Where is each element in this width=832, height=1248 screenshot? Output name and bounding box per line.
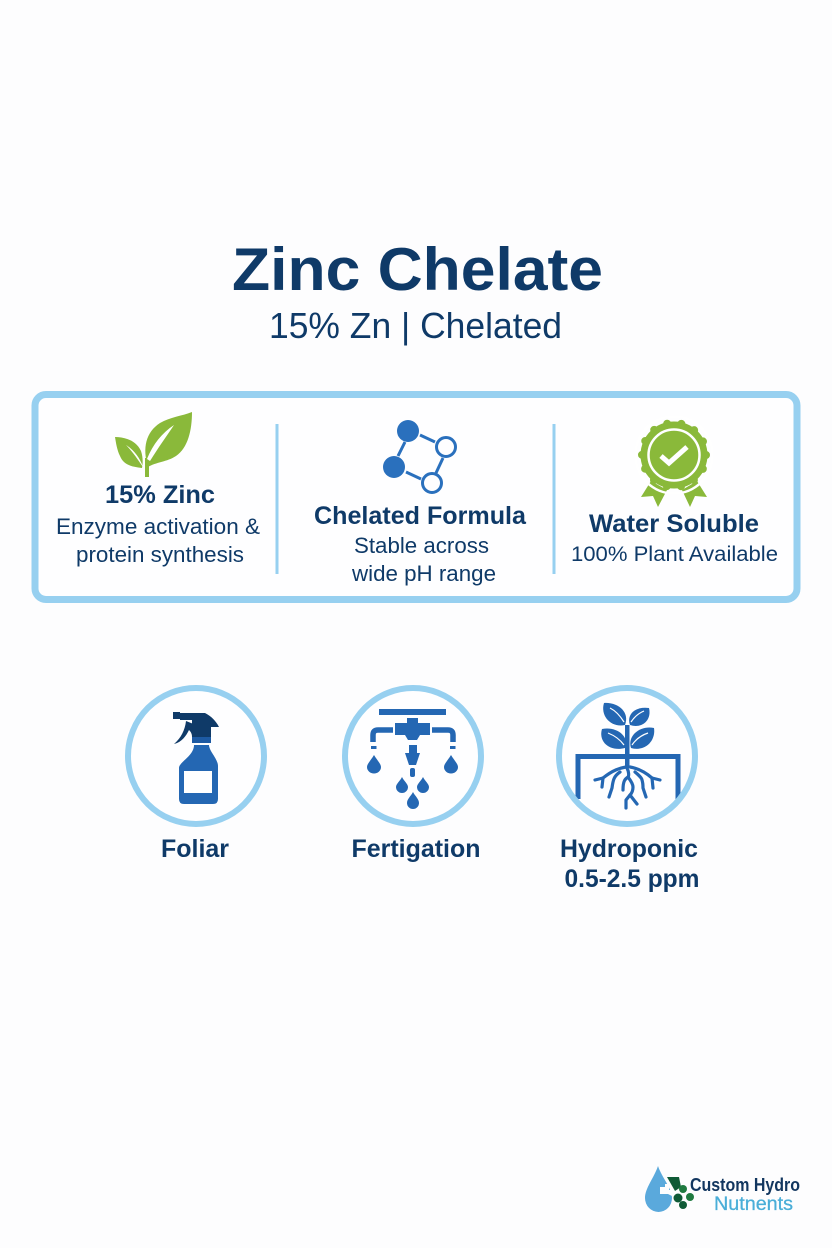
text: zinc benefit: protein synthesis	[76, 542, 244, 567]
text: chelated benefit: Stable across	[354, 533, 489, 558]
label: hydroponic rate: Hydroponic	[560, 835, 698, 863]
heading: chelated formula: Chelated Formula	[314, 502, 527, 530]
column: water soluble	[571, 416, 778, 566]
title: Zinc Chelate	[232, 236, 603, 303]
label: fertigation: Fertigation	[352, 835, 480, 863]
logo: custom hydro nutnents	[645, 1166, 800, 1215]
column: chelated formula	[314, 420, 527, 586]
column: 15% zinc	[56, 412, 260, 567]
panel: product benefits	[35, 394, 797, 600]
text: water soluble benefit: 100% Plant Available	[571, 543, 778, 566]
label: foliar: Foliar	[161, 835, 229, 863]
heading: water soluble: Water Soluble	[589, 510, 759, 538]
icon: plant with roots in tank	[559, 688, 695, 824]
subtitle: 15% Zn | Chelated	[269, 305, 562, 346]
application: foliar	[128, 688, 264, 863]
icon: green leaves	[115, 412, 192, 477]
text: zinc benefit	[56, 514, 260, 567]
icon: green award badge	[636, 416, 712, 507]
text: chelated benefit: wide pH range	[351, 561, 496, 586]
application: hydroponic	[559, 688, 700, 893]
text: chelated benefit	[351, 533, 496, 586]
label: hydroponic rate	[560, 835, 700, 893]
icon: spray bottle	[128, 688, 264, 824]
icon: fertigation dripper	[345, 688, 481, 824]
text: brand name second line: Nutnents	[714, 1194, 793, 1215]
icon: water drop with green cells	[645, 1166, 694, 1212]
label: hydroponic rate: 0.5-2.5 ppm	[564, 865, 700, 893]
text: brand name: Custom Hydro	[690, 1175, 800, 1195]
heading: 15% zinc: 15% Zinc	[105, 481, 215, 509]
icon: molecule	[383, 420, 456, 492]
application: fertigation	[345, 688, 481, 863]
text: zinc benefit: Enzyme activation &	[56, 514, 260, 539]
